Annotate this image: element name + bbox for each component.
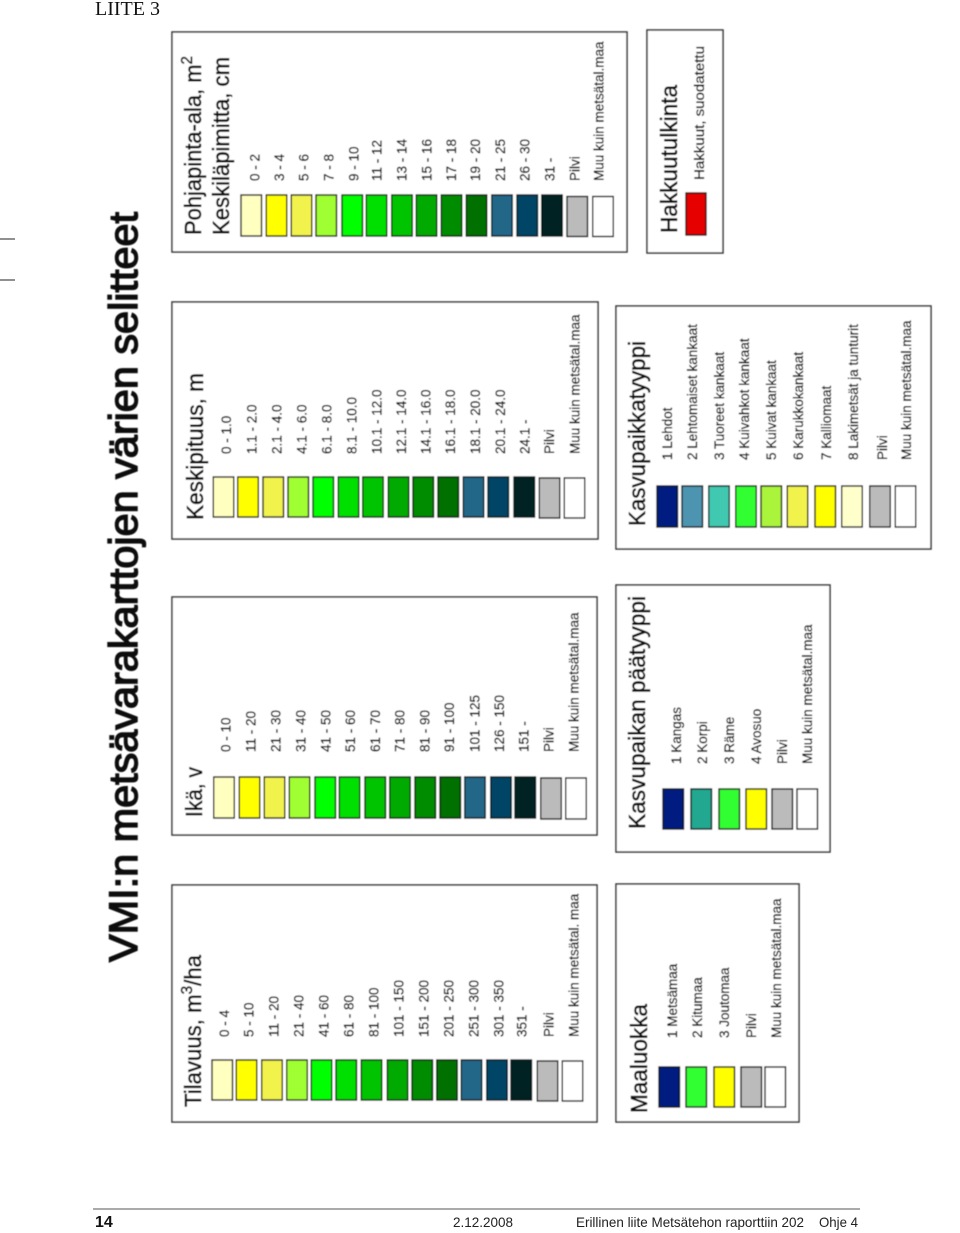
item: 21 - 30 <box>264 710 285 818</box>
item: 11 - 20: 11 - 20 <box>266 996 281 1037</box>
item: Muu kuin metsätal.maa <box>765 898 786 1107</box>
item: 21 - 40 <box>287 995 307 1100</box>
item: Muu kuin metsätal. maa <box>562 893 583 1101</box>
item: 81 - 100 <box>361 987 382 1100</box>
heading: Keskiläpimitta: Keskiläpimitta, cm <box>208 57 234 235</box>
item: 15 - 16: 15 - 16 <box>420 139 435 181</box>
item: 301 - 350: 301 - 350 <box>491 980 506 1037</box>
guide number: Ohje 4 <box>819 1214 858 1230</box>
item: Muu kuin metsätal.maa <box>797 624 818 829</box>
item: 11 - 20: 11 - 20 <box>244 711 259 752</box>
item: Pilvi: Pilvi <box>541 1012 556 1037</box>
item: 81 - 100: 81 - 100 <box>366 987 381 1037</box>
item: 31 - <box>542 158 562 236</box>
item: 17 - 18 <box>441 139 462 236</box>
item: Pilvi: Pilvi <box>875 435 890 460</box>
item: Pilvi <box>870 435 890 527</box>
item: 1 Metsämaa <box>659 963 680 1107</box>
item: 5 - 10: 5 - 10 <box>241 1002 256 1037</box>
item: 4 Avosuo: 4 Avosuo <box>749 709 764 764</box>
item: 101 - 125: 101 - 125 <box>467 695 482 752</box>
item: 1 Lehdot <box>657 407 678 527</box>
item: 21 - 25: 21 - 25 <box>493 139 508 181</box>
item: Pilvi: Pilvi <box>744 1013 759 1038</box>
margin tick marks <box>0 239 15 280</box>
panel: Hakkuutulkinta <box>647 30 723 253</box>
footer <box>93 1209 860 1231</box>
item: 81 - 90: 81 - 90 <box>417 710 432 752</box>
date: 2.12.2008 <box>453 1214 513 1230</box>
item: 91 - 100: 91 - 100 <box>442 702 457 752</box>
item: 101 - 150 <box>387 980 408 1100</box>
item: 13 - 14: 13 - 14 <box>395 138 410 181</box>
item: 21 - 40: 21 - 40 <box>291 995 306 1037</box>
item: 71 - 80: 71 - 80 <box>392 710 407 752</box>
item: 19 - 20 <box>466 139 487 236</box>
item: 10.1 - 12.0: 10.1 - 12.0 <box>370 389 385 454</box>
item: Pilvi <box>541 727 561 819</box>
item: 0 - 4 <box>212 1009 232 1100</box>
item: 251 - 300 <box>461 980 482 1100</box>
item: 2.1 - 4.0: 2.1 - 4.0 <box>270 404 285 454</box>
item: 1.1 - 2.0: 1.1 - 2.0 <box>245 404 260 454</box>
item: 7 Kalliomaat <box>815 385 836 527</box>
item: 21 - 30: 21 - 30 <box>269 710 284 752</box>
item: 8 Lakimetsät ja tunturit <box>842 324 862 527</box>
item: 31 - 40: 31 - 40 <box>294 710 309 752</box>
item: 2 Kitumaa: 2 Kitumaa <box>690 977 705 1038</box>
item: 12.1 - 14.0: 12.1 - 14.0 <box>394 389 409 454</box>
item: 3 Tuoreet kankaat: 3 Tuoreet kankaat <box>712 352 727 460</box>
item: 0 - 1.0 <box>213 416 234 517</box>
item: 7 Kalliomaat: 7 Kalliomaat <box>819 385 834 460</box>
panel: Kasvupaikan päätyyppi <box>616 585 830 852</box>
item: 4.1 - 6.0: 4.1 - 6.0 <box>295 404 310 454</box>
item: 3 - 4 <box>266 153 287 236</box>
item: 71 - 80 <box>390 710 410 818</box>
heading: Kasvupaikan päätyyppi: Kasvupaikan päätyyppi <box>624 596 650 829</box>
item: 16.1 - 18.0: 16.1 - 18.0 <box>443 389 458 454</box>
item: 8.1 - 10.0 <box>338 397 360 517</box>
item: Muu kuin metsätal.maa: Muu kuin metsätal.maa <box>800 624 815 764</box>
item: 26 - 30: 26 - 30 <box>517 139 532 181</box>
item: 5 - 6 <box>291 154 312 236</box>
item: Pilvi: Pilvi <box>541 727 556 752</box>
item: 21 - 25 <box>492 139 512 236</box>
panel: Keskipituus <box>172 302 598 539</box>
item: 2.1 - 4.0 <box>263 404 285 517</box>
item: 6 Karukkokankaat: 6 Karukkokankaat <box>791 352 806 460</box>
heading: Hakkuutulkinta: Hakkuutulkinta <box>656 85 682 233</box>
item: 151 - 200 <box>412 980 432 1100</box>
item: 3 Räme: 3 Räme <box>722 717 737 764</box>
item: 10.1 - 12.0 <box>363 389 385 517</box>
item: 18.1 - 20.0: 18.1 - 20.0 <box>468 389 483 454</box>
item: 351 -: 351 - <box>515 1006 530 1037</box>
item: Muu kuin metsätal.maa: Muu kuin metsätal.maa <box>769 898 784 1038</box>
item: Muu kuin metsätal. maa: Muu kuin metsätal. maa <box>566 893 581 1037</box>
item: 1 Metsämaa: 1 Metsämaa <box>665 963 680 1038</box>
item: Pilvi: Pilvi <box>775 739 790 764</box>
item: 11 - 12: 11 - 12 <box>370 140 385 181</box>
item: 1 Kangas <box>663 707 684 829</box>
item: 6 Karukkokankaat <box>787 352 808 527</box>
item: 6.1 - 8.0: 6.1 - 8.0 <box>320 404 335 454</box>
heading: Pohjapinta-ala: 2 <box>179 56 196 64</box>
heading: Pohjapinta-ala: Pohjapinta-ala, m <box>180 56 206 235</box>
panel: Kasvupaikkatyyppi <box>616 306 931 549</box>
item: 151 -: 151 - <box>516 721 531 752</box>
item: 26 - 30 <box>517 139 538 236</box>
item: 1 Lehdot: 1 Lehdot <box>660 407 675 460</box>
item: 14.1 - 16.0 <box>413 389 434 517</box>
item: 301 - 350 <box>487 980 507 1100</box>
item: 61 - 80 <box>336 995 356 1100</box>
item: Hakkuut, suodatettu <box>686 46 707 235</box>
item: 151 - <box>515 721 536 818</box>
item: 11 - 12 <box>366 140 387 236</box>
panel: Pohjapinta-ala / Keskiläpimitta <box>172 32 627 252</box>
item: 7 - 8 <box>316 154 336 236</box>
item: 5 Kuivat kankaat: 5 Kuivat kankaat <box>764 360 779 460</box>
item: 20.1 - 24.0: 20.1 - 24.0 <box>493 389 508 454</box>
item: 12.1 - 14.0 <box>388 389 409 517</box>
item: 9 - 10: 9 - 10 <box>346 146 361 181</box>
item: 31 - 40 <box>289 710 310 818</box>
item: 4 Kuivahkot kankaat <box>736 338 756 527</box>
item: 151 - 200: 151 - 200 <box>416 980 431 1037</box>
item: 7 - 8: 7 - 8 <box>321 154 336 181</box>
item: 0 - 2 <box>241 154 262 236</box>
item: 15 - 16 <box>416 139 437 236</box>
item: 51 - 60 <box>339 710 360 818</box>
item: 201 - 250 <box>437 980 457 1100</box>
item: Muu kuin metsätal.maa <box>895 320 916 527</box>
item: 11 - 20 <box>262 996 282 1100</box>
item: Muu kuin metsätal.maa: Muu kuin metsätal.maa <box>899 320 914 460</box>
item: Muu kuin metsätal.maa <box>591 41 613 236</box>
item: 16.1 - 18.0 <box>438 389 458 517</box>
item: 41 - 60 <box>311 995 332 1100</box>
item: 0 - 4: 0 - 4 <box>217 1009 232 1037</box>
page number: 14 <box>95 1214 113 1231</box>
item: 41 - 60: 41 - 60 <box>316 995 331 1037</box>
item: Hakkuut, suodatettu: Hakkuut, suodatettu <box>692 46 707 180</box>
item: 6.1 - 8.0 <box>313 404 335 517</box>
item: Pilvi <box>772 739 792 829</box>
item: Pilvi <box>539 429 560 518</box>
item: 19 - 20: 19 - 20 <box>468 139 483 181</box>
item: Pilvi <box>567 156 588 236</box>
item: 1 Kangas: 1 Kangas <box>669 707 684 764</box>
report reference: Erillinen liite Metsätehon raporttiin 202 <box>576 1214 804 1230</box>
heading: Tilavuus: Tilavuus, m <box>180 990 206 1107</box>
item: 5 - 6: 5 - 6 <box>296 154 311 181</box>
item: 3 Räme <box>719 717 740 829</box>
item: 8 Lakimetsät ja tunturit: 8 Lakimetsät ja tunturit <box>846 324 861 460</box>
item: 17 - 18: 17 - 18 <box>444 139 459 181</box>
item: 61 - 70: 61 - 70 <box>368 710 383 752</box>
item: 24.1 -: 24.1 - <box>517 419 532 454</box>
panel: Ikä <box>172 597 597 835</box>
item: 3 Joutomaa <box>714 967 734 1107</box>
main title: VMI:n metsävarakarttojen värien selitteet <box>102 212 146 962</box>
item: Muu kuin metsätal.maa: Muu kuin metsätal.maa <box>591 41 606 181</box>
item: 351 - <box>511 1006 532 1100</box>
item: 2 Kitumaa <box>686 977 706 1107</box>
item: Muu kuin metsätal.maa <box>566 612 586 819</box>
item: Muu kuin metsätal.maa: Muu kuin metsätal.maa <box>566 612 581 752</box>
item: 41 - 50 <box>315 710 336 818</box>
item: 61 - 80: 61 - 80 <box>341 995 356 1037</box>
item: Pilvi <box>741 1013 762 1107</box>
item: 4 Avosuo <box>746 709 766 829</box>
heading: Tilavuus: 3 <box>179 986 196 994</box>
item: 61 - 70 <box>365 710 386 818</box>
item: 31 -: 31 - <box>542 158 557 181</box>
item: Muu kuin metsätal.maa <box>564 314 585 518</box>
item: 0 - 10 <box>214 717 234 818</box>
item: 101 - 150: 101 - 150 <box>391 980 406 1037</box>
item: 2 Lehtomaiset kankaat: 2 Lehtomaiset kankaat <box>685 324 700 460</box>
item: 201 - 250: 201 - 250 <box>441 980 456 1037</box>
item: Pilvi <box>537 1012 558 1101</box>
heading: Tilavuus: /ha <box>180 955 206 986</box>
item: 101 - 125 <box>465 695 485 818</box>
item: 126 - 150 <box>491 695 511 818</box>
item: Pilvi: Pilvi <box>567 156 582 181</box>
item: 91 - 100 <box>440 702 460 818</box>
item: 0 - 2: 0 - 2 <box>247 154 262 181</box>
heading: Maaluokka: Maaluokka <box>626 1004 652 1113</box>
heading: Keskipituus: Keskipituus, m <box>182 373 208 520</box>
panel: Tilavuus <box>172 885 597 1122</box>
item: 5 - 10 <box>236 1002 257 1100</box>
heading: Ikä: Ikä, v <box>181 767 207 817</box>
item: 2 Korpi: 2 Korpi <box>695 721 710 764</box>
item: 1.1 - 2.0 <box>238 404 260 517</box>
item: 5 Kuivat kankaat <box>761 360 782 527</box>
item: 41 - 50: 41 - 50 <box>319 710 334 752</box>
item: Pilvi: Pilvi <box>542 429 557 454</box>
item: 251 - 300: 251 - 300 <box>466 980 481 1037</box>
item: 4.1 - 6.0 <box>288 404 310 517</box>
item: 8.1 - 10.0: 8.1 - 10.0 <box>345 397 360 454</box>
item: 18.1 - 20.0 <box>463 389 484 517</box>
item: 3 - 4: 3 - 4 <box>272 153 287 181</box>
item: 2 Lehtomaiset kankaat <box>682 324 702 527</box>
item: 2 Korpi <box>691 721 712 829</box>
item: 3 Tuoreet kankaat <box>709 352 729 527</box>
item: 3 Joutomaa: 3 Joutomaa <box>717 967 732 1038</box>
item: 4 Kuivahkot kankaat: 4 Kuivahkot kankaat <box>737 338 752 460</box>
item: 81 - 90 <box>415 710 436 818</box>
panel: Maaluokka <box>616 884 799 1122</box>
item: 20.1 - 24.0 <box>488 389 508 517</box>
item: Muu kuin metsätal.maa: Muu kuin metsätal.maa <box>567 314 582 454</box>
item: 11 - 20 <box>239 711 260 818</box>
item: 0 - 10: 0 - 10 <box>219 717 234 752</box>
item: 24.1 - <box>514 419 534 517</box>
item: 126 - 150: 126 - 150 <box>492 695 507 752</box>
item: 51 - 60: 51 - 60 <box>343 710 358 752</box>
heading: Kasvupaikkatyyppi: Kasvupaikkatyyppi <box>624 341 650 526</box>
item: 9 - 10 <box>342 146 362 236</box>
item: 14.1 - 16.0: 14.1 - 16.0 <box>419 389 434 454</box>
item: 0 - 1.0: 0 - 1.0 <box>219 416 234 454</box>
item: 13 - 14 <box>392 138 412 236</box>
